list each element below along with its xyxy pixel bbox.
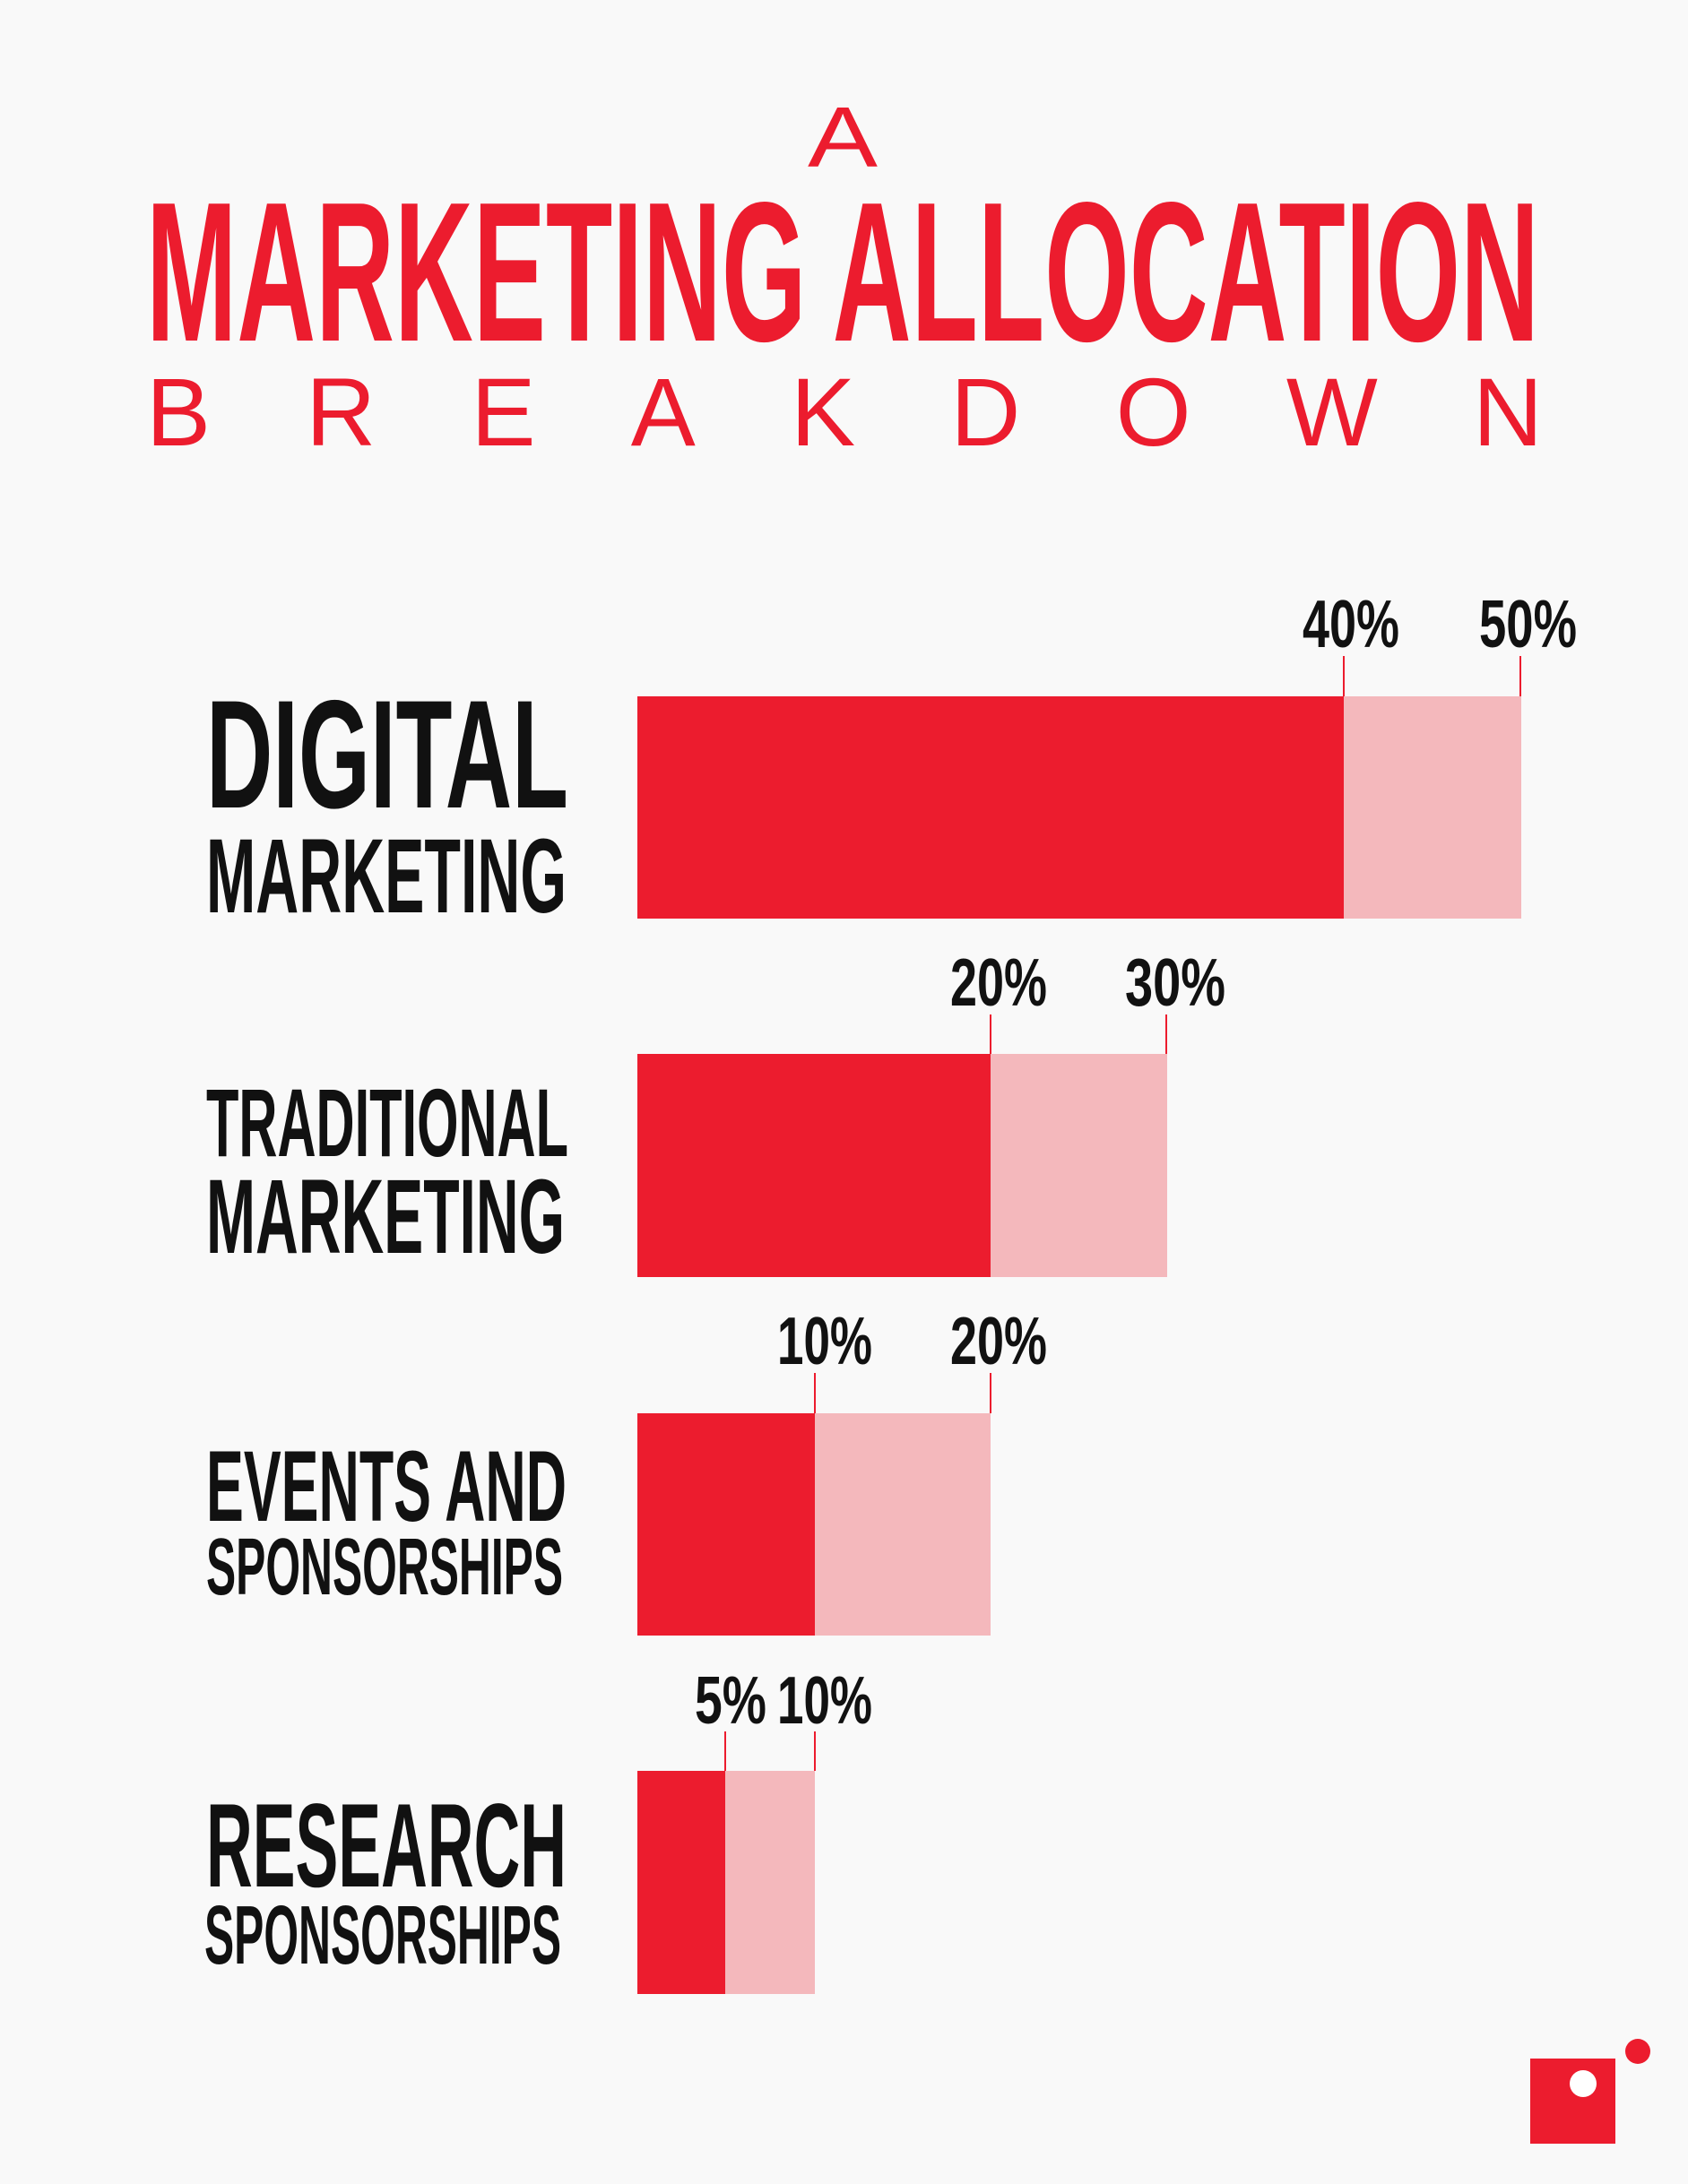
bar: events xyxy=(637,1413,991,1636)
percent labels: research: 10% xyxy=(777,1662,872,1738)
label: events: EVENTS AND xyxy=(206,1430,567,1542)
label: research: RESEARCH xyxy=(206,1780,567,1912)
percent labels: events: 20% xyxy=(950,1303,1047,1378)
percent labels: digital xyxy=(1303,586,1577,696)
bar: digital xyxy=(637,696,1521,919)
label: events xyxy=(206,1430,567,1612)
percent labels: traditional: 20% xyxy=(950,945,1047,1020)
row: events and sponsorships xyxy=(206,1303,1047,1636)
title xyxy=(146,90,1543,466)
label: traditional marketing: MARKETING xyxy=(206,1158,565,1276)
label: research xyxy=(204,1780,567,1981)
label: digital marketing xyxy=(206,669,568,936)
percent labels: research xyxy=(695,1662,872,1771)
label: traditional marketing: TRADITIONAL xyxy=(206,1068,568,1177)
label: digital marketing: MARKETING xyxy=(206,817,567,936)
percent labels: events: 10% xyxy=(777,1303,872,1378)
title: BREAKDOWN xyxy=(146,358,1543,466)
bar: traditional xyxy=(637,1054,1167,1277)
bar: research xyxy=(637,1771,815,1994)
label: research: SPONSORSHIPS xyxy=(204,1888,561,1981)
percent labels: traditional xyxy=(950,945,1225,1054)
percent labels: digital: 40% xyxy=(1303,586,1399,661)
percent labels: traditional: 30% xyxy=(1125,945,1225,1020)
label: digital marketing: DIGITAL xyxy=(206,669,568,841)
logo xyxy=(1530,2039,1650,2144)
label: events: SPONSORSHIPS xyxy=(206,1523,563,1612)
percent labels: digital: 50% xyxy=(1479,586,1577,661)
row: traditional marketing xyxy=(206,945,1225,1277)
label: traditional marketing xyxy=(206,1068,568,1276)
title: A xyxy=(808,90,878,186)
row: digital marketing xyxy=(206,586,1577,936)
row: research sponsorships xyxy=(204,1662,872,1994)
percent labels: research: 5% xyxy=(695,1662,766,1738)
percent labels: events xyxy=(777,1303,1047,1413)
